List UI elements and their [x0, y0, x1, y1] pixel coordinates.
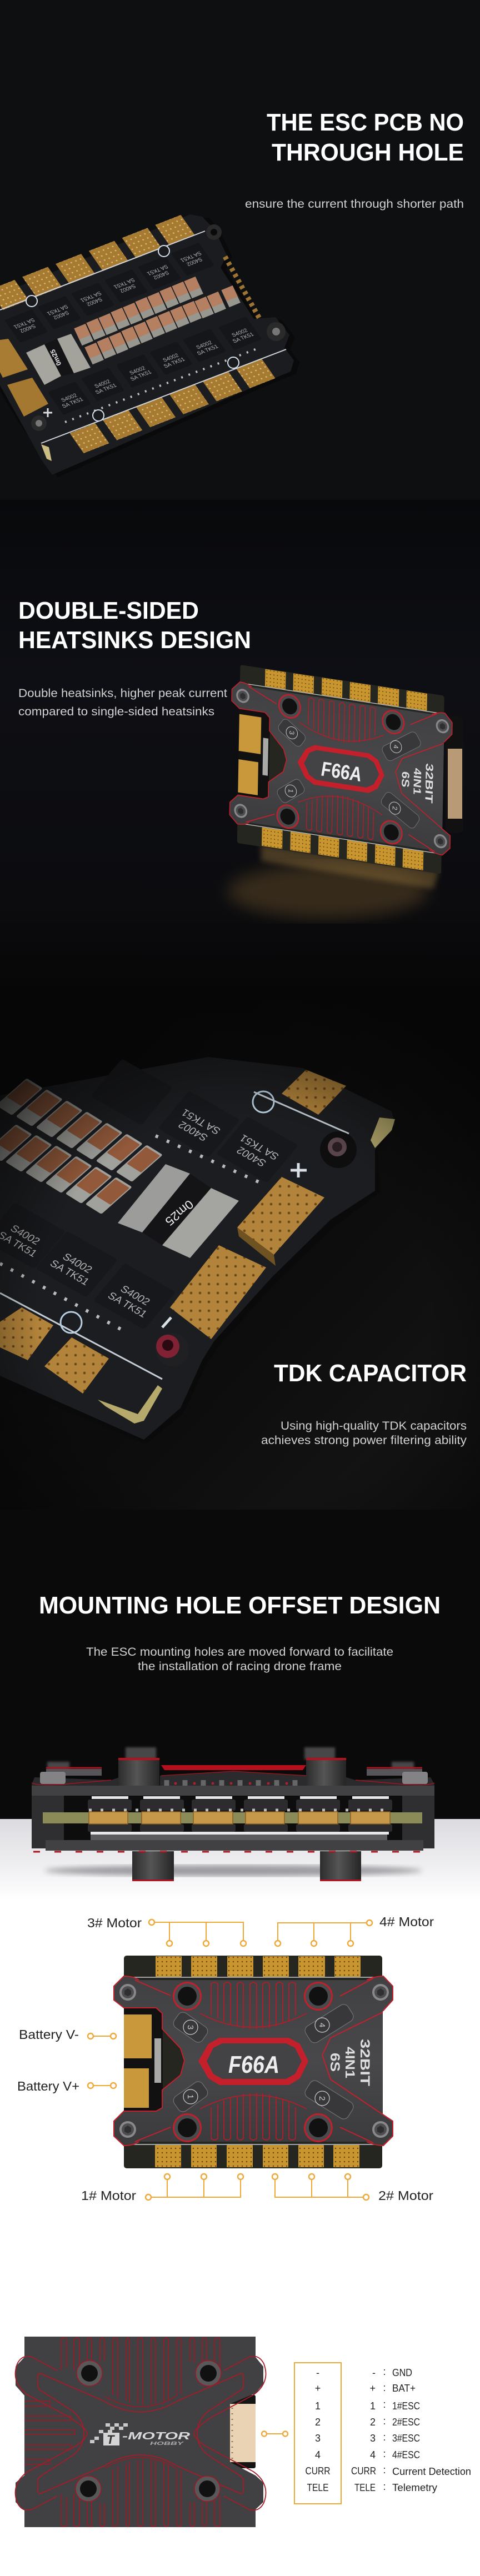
spec text 32BIT 4IN1 6S: 6S	[327, 2053, 342, 2072]
callout: battery V+	[17, 2079, 116, 2093]
left battery pads	[0, 339, 28, 378]
MOSFET row lower: S4002	[60, 393, 79, 403]
MOSFET chips lower row: SA TK51	[105, 1290, 149, 1320]
panel: wiring top diagram	[0, 1900, 480, 2233]
photo: ESC top view with heatsink	[229, 664, 453, 875]
pinout legend: 4#ESC	[392, 2449, 420, 2460]
heatsink fins bottom	[61, 2457, 220, 2527]
pinout legend: 3#ESC	[392, 2433, 420, 2444]
pinout legend: +	[369, 2383, 376, 2394]
photo: ESC top view with heatsink: 2	[391, 806, 398, 811]
text: mounting description: The ESC mounting holes are moved forward to facilitate	[86, 1646, 393, 1658]
text: TDK description: Using high-quality TDK capacitors	[281, 1420, 467, 1432]
MOSFET chips lower row: S4002	[8, 1223, 42, 1247]
callout: battery V-	[19, 2027, 116, 2042]
numbered markers	[186, 2023, 327, 2101]
pinout legend: 2	[370, 2417, 376, 2428]
gold pad plus	[237, 1177, 324, 1255]
MOSFET chips lower row: S4002	[60, 1251, 94, 1276]
lobes and centre outline	[16, 2356, 266, 2510]
pinout box: 2	[315, 2417, 321, 2428]
text: mounting description: the installation of racing drone frame	[138, 1660, 342, 1673]
MOSFET row lower: SA TK51	[129, 369, 153, 382]
heading: double-sided heatsinks design: DOUBLE-SIDED	[18, 597, 199, 624]
pin rows	[0, 1136, 261, 1333]
heading: mounting hole offset design: MOUNTING HOLE OFFSET DESIGN	[39, 1592, 441, 1619]
MOSFET row upper: SA TK51	[79, 290, 103, 303]
pinout box: +	[315, 2383, 321, 2394]
connector	[228, 2395, 256, 2468]
MOSFET row lower: S4002	[162, 353, 181, 363]
pinout legend: -	[372, 2367, 376, 2378]
mounting holes	[31, 224, 286, 431]
silkscreen lines	[0, 1092, 349, 1379]
top gold pad	[282, 1070, 346, 1115]
heading: double-sided heatsinks design: HEATSINKS DESIGN	[18, 627, 251, 654]
T-Motor Hobby logo: -MOTOR	[122, 2430, 190, 2442]
MOSFET row upper: S4002	[118, 283, 137, 294]
silkscreen plus and minus	[162, 1163, 307, 1327]
silkscreen markers	[61, 1091, 274, 1333]
pinout legend: :	[383, 2432, 386, 2443]
text: mounting description	[86, 1646, 393, 1673]
spec text 32BIT 4IN1 6S: 32BIT	[357, 2039, 372, 2086]
pinout legend: BAT+	[392, 2383, 416, 2394]
panel: signal connector pinout	[0, 2233, 480, 2576]
heading: the ESC PCB no through hole: THE ESC PCB NO	[267, 109, 464, 136]
pinout legend: :	[383, 2415, 386, 2427]
text: double heatsinks description	[18, 687, 227, 718]
pinout legend: CURR	[351, 2465, 376, 2477]
panel: double-sided heatsinks	[0, 500, 480, 1000]
MOSFET row upper: S4002	[52, 309, 70, 320]
pinout legend: TELE	[354, 2482, 376, 2493]
pinout box: TELE	[307, 2482, 329, 2493]
spec text 32BIT 4IN1 6S: 4IN1	[342, 2047, 357, 2078]
connector side	[446, 716, 463, 833]
photo: ESC top view with heatsink: 32BIT	[423, 763, 435, 804]
MOSFET row upper: S4002	[152, 269, 170, 280]
pinout legend: 1	[370, 2400, 376, 2412]
pinout legend: :	[383, 2366, 386, 2377]
pinout legend	[351, 2366, 471, 2493]
panel: TDK capacitor	[0, 1000, 480, 1511]
MOSFET chips upper row	[91, 1059, 298, 1183]
T-Motor Hobby logo	[90, 2423, 190, 2447]
pinout legend: 3	[370, 2433, 376, 2444]
MOSFET row lower: SA TK51	[196, 344, 220, 357]
panel: PCB no through hole	[0, 0, 480, 500]
panel: mounting hole offset	[0, 1510, 480, 1900]
MOSFET chips lower row: S4002	[118, 1284, 152, 1308]
mounting hole top	[320, 1131, 357, 1168]
silkscreen plus	[43, 408, 52, 417]
MOSFET chips lower row	[0, 1202, 176, 1330]
FR4 board edges	[98, 1117, 395, 1424]
right side gold pins	[225, 257, 260, 319]
mounting holes	[76, 2361, 221, 2502]
numbered markers: 2	[317, 2096, 327, 2101]
text: ensure the current: ensure the current through shorter path	[245, 198, 464, 211]
pinout legend: Current Detection	[392, 2466, 471, 2477]
top row solder pads	[0, 215, 195, 310]
pin rows	[65, 347, 261, 422]
photo: PCB close-up	[0, 1000, 480, 1511]
MOSFET chips upper row: SA TK51	[238, 1132, 282, 1162]
MOSFET row upper: S4002	[185, 256, 203, 267]
pinout box	[294, 2363, 341, 2504]
pinout box: CURR	[306, 2465, 330, 2477]
pinout legend: 1#ESC	[392, 2400, 420, 2412]
callout: 4# motor: 4# Motor	[379, 1915, 434, 1929]
MOSFET row lower: SA TK51	[232, 332, 256, 344]
photo: ESC top view with heatsink: F66A	[321, 756, 362, 786]
MOSFET row upper: S4002	[18, 323, 37, 334]
T-Motor Hobby logo: T	[107, 2433, 115, 2447]
shunt resistor 0m25	[118, 1164, 239, 1258]
back plate body	[16, 2337, 263, 2527]
photo: ESC top view with heatsink: 3	[288, 730, 296, 735]
heading: TDK capacitor: TDK CAPACITOR	[274, 1360, 467, 1387]
pinout legend: :	[383, 2448, 386, 2459]
MOSFET row upper: S4002	[85, 296, 103, 307]
MOSFET row lower: S4002	[93, 379, 112, 389]
shunt resistor 0m25: 0m25	[163, 1197, 196, 1229]
heading: double-sided heatsinks design	[18, 597, 251, 654]
callout: 1# motor	[81, 2174, 243, 2203]
pinout legend: :	[383, 2464, 386, 2475]
pinout legend: GND	[392, 2367, 412, 2378]
callout: 2# motor	[272, 2174, 433, 2203]
callout: 3# motor	[87, 1916, 246, 1946]
pinout box: 4	[315, 2449, 321, 2460]
callout: 3# motor: 3# Motor	[87, 1916, 142, 1930]
photo: ESC top view with heatsink: 6S	[399, 770, 411, 788]
pinout legend: :	[383, 2481, 386, 2492]
MOSFET row upper: SA TK51	[12, 317, 36, 329]
MOSFET row upper: SA TK51	[179, 250, 203, 263]
capacitor rows	[74, 277, 241, 364]
pinout legend: :	[383, 2399, 386, 2410]
callout: 2# motor: 2# Motor	[378, 2188, 433, 2203]
pinout box: -	[316, 2367, 319, 2378]
pinout legend: 2#ESC	[392, 2417, 420, 2428]
MOSFET chips upper row: S4002	[234, 1144, 269, 1169]
heatsink fins left	[24, 2401, 75, 2464]
MOSFET row lower: S4002	[195, 340, 214, 350]
photo: ESC PCB angled view	[0, 214, 299, 477]
photo: ESC top view with heatsink: 4	[392, 744, 399, 749]
MOSFET row upper: SA TK51	[46, 303, 69, 316]
MOSFET chips upper row: S4002	[176, 1119, 211, 1143]
silkscreen number markers	[26, 245, 239, 421]
photo: ESC top view	[114, 1956, 393, 2168]
pinout legend: 4	[370, 2449, 376, 2460]
F66A logo: F66A	[228, 2051, 279, 2078]
shunt resistor 0m25	[26, 334, 91, 385]
MOSFET row lower: S4002	[128, 365, 147, 376]
MOSFET row upper: SA TK51	[146, 263, 169, 276]
photo: ESC top view with heatsink: 1	[287, 789, 294, 794]
numbered markers: 3	[186, 2025, 195, 2029]
callout: battery V+: Battery V+	[17, 2079, 79, 2093]
MOSFET row lower: S4002	[231, 328, 249, 338]
gold side pads	[89, 1812, 390, 1824]
pinout box: 3	[315, 2433, 321, 2444]
MOSFET row lower	[48, 317, 262, 415]
MOSFET row lower: SA TK51	[61, 397, 85, 409]
MOSFET chips lower row: SA TK51	[47, 1258, 91, 1287]
gold pad minus	[170, 1245, 266, 1339]
photo: ESC back view	[16, 2337, 266, 2527]
pinout box: 1	[315, 2400, 321, 2412]
heading: the ESC PCB no through hole: THROUGH HOLE	[272, 139, 464, 166]
photo: ESC side view	[32, 1747, 434, 1881]
callout: 4# motor	[275, 1915, 434, 1946]
capacitor rows	[0, 1078, 163, 1214]
bottom row solder pads	[69, 358, 276, 453]
text: TDK description	[261, 1420, 467, 1447]
callout: 1# motor: 1# Motor	[81, 2188, 136, 2203]
left lower gold pads	[0, 1307, 109, 1394]
T-Motor Hobby logo: HOBBY	[150, 2441, 184, 2446]
MOSFET row lower: SA TK51	[94, 383, 118, 395]
shunt resistor 0m25: 0m25	[48, 348, 63, 367]
MOSFET row lower: SA TK51	[163, 357, 187, 369]
text: double heatsinks description: Double heatsinks, higher peak current	[18, 687, 227, 700]
reflection glow on table	[228, 844, 439, 918]
numbered markers: 4	[317, 2023, 327, 2027]
heatsink fins top	[61, 2338, 220, 2407]
text: double heatsinks description: compared to single-sided heatsinks	[18, 705, 214, 718]
MOSFET row upper: SA TK51	[112, 277, 136, 289]
heading: the ESC PCB no through hole	[267, 109, 464, 166]
connector callout	[262, 2432, 288, 2436]
MOSFET chips upper row: SA TK51	[179, 1106, 223, 1136]
spec text 32BIT 4IN1 6S	[327, 2039, 372, 2086]
numbered markers: 1	[186, 2094, 195, 2099]
photo: ESC top view with heatsink: 4IN1	[411, 767, 423, 796]
mounting hole red	[156, 1333, 189, 1366]
text: TDK description: achieves strong power filtering ability	[261, 1434, 467, 1447]
callout: battery V-: Battery V-	[19, 2027, 79, 2042]
pinout legend: :	[383, 2382, 386, 2393]
MOSFET row upper	[4, 243, 214, 343]
pinout legend: Telemetry	[392, 2482, 437, 2493]
